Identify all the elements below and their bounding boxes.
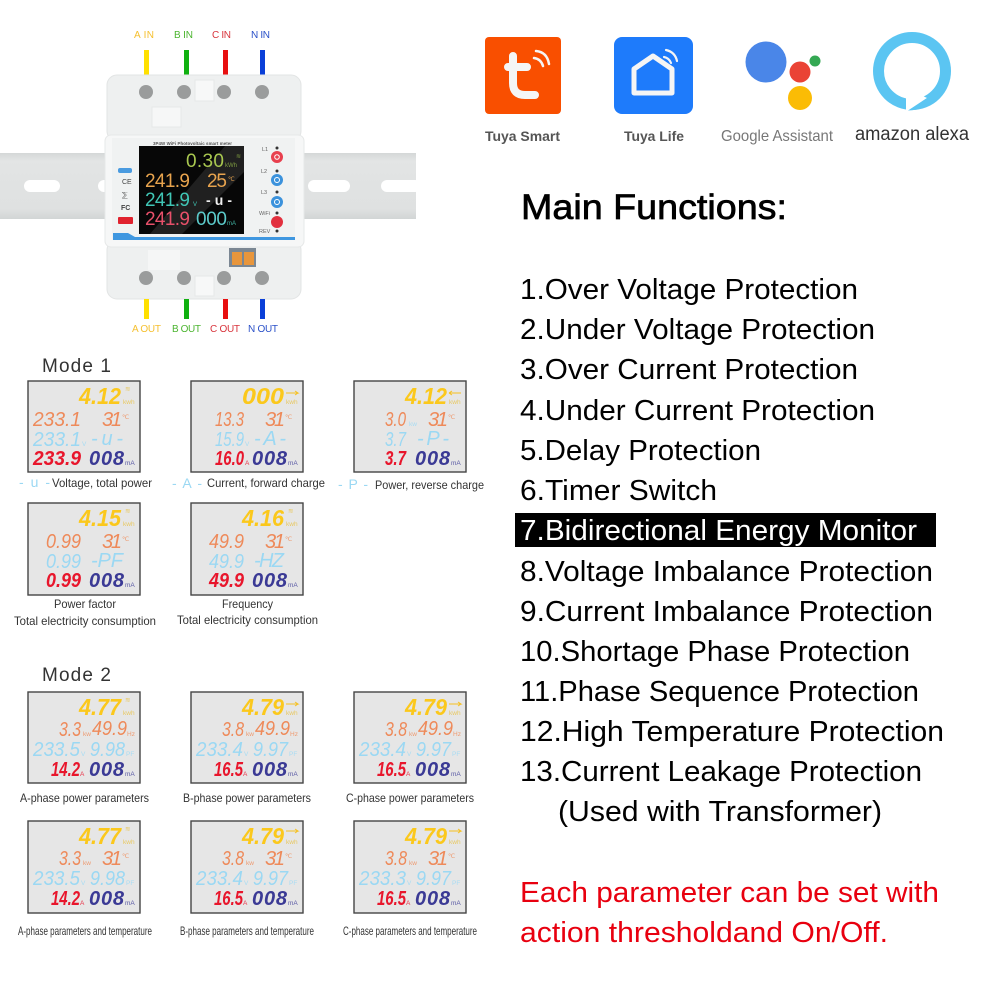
device: din rail smart meter <box>0 30 421 335</box>
note: red parameter text: action thresholdand On/Off. <box>520 917 888 949</box>
lcd: power factor: 0.99 <box>46 570 82 592</box>
lcd: a-phase power: ≋ <box>125 697 131 704</box>
lcd: voltage, total power: 233.9 <box>32 448 82 470</box>
lcd: c-phase temperature: 16.5 <box>377 888 407 910</box>
label: tuya smart: Tuya Smart <box>485 128 560 144</box>
label: google assistant: Google Assistant <box>721 128 834 145</box>
lcd: voltage, total power: -u- <box>91 428 123 450</box>
lcd: a-phase power: 49.9 <box>92 718 127 740</box>
lcd: c-phase power: 4.79 <box>404 694 447 720</box>
lcd: c-phase power: V <box>407 751 412 758</box>
lcd: b-phase temperature: 008 <box>252 888 288 910</box>
input labels: B IN <box>174 30 193 41</box>
lcd: b-phase temperature: A <box>243 900 248 907</box>
lcd: b-phase temperature: mA <box>288 900 298 907</box>
lcd: a-phase temperature <box>28 821 140 913</box>
lcd: a-phase temperature: PF <box>126 880 134 887</box>
lcd: b-phase temperature: 3.8 <box>222 848 244 870</box>
meter display: 241.9 <box>145 190 190 211</box>
caption: b-phase power: B-phase power parameters <box>183 791 311 805</box>
caption: a-phase temperature: A-phase parameters and temperature <box>18 924 152 938</box>
lcd: b-phase power: kwh <box>286 710 298 717</box>
lcd: power, reverse charge: 008 <box>415 448 451 470</box>
output labels <box>132 324 278 335</box>
lcd: c-phase temperature: kw <box>409 860 417 867</box>
lcd: c-phase power: kw <box>409 731 417 738</box>
lcd: power factor: 008 <box>89 570 125 592</box>
lcd: current, forward charge: 13.3 <box>215 409 244 431</box>
meter display: V <box>193 202 197 208</box>
heading: mode 1: Mode 1 <box>42 356 111 377</box>
lcd: power, reverse charge: 3.7 <box>385 448 407 470</box>
icon: amazon alexa <box>878 38 946 111</box>
meter display: 000 <box>196 209 227 230</box>
lcd: frequency <box>191 503 303 595</box>
lcd: current, forward charge: A <box>245 460 250 467</box>
lcd: b-phase power: 16.5 <box>214 759 244 781</box>
lcd: a-phase power: 008 <box>89 759 125 781</box>
lcd: c-phase power: 49.9 <box>418 718 453 740</box>
caption: frequency: Frequency <box>222 597 273 611</box>
lcd: c-phase power: A <box>406 771 411 778</box>
lcd: a-phase temperature: 31 <box>102 848 122 870</box>
lcd: frequency: 49.9 <box>209 531 244 553</box>
note: red parameter text <box>520 877 939 949</box>
lcd: voltage, total power: 008 <box>89 448 125 470</box>
lcd: c-phase power: 3.8 <box>385 719 407 741</box>
meter display: ≋ <box>236 154 241 160</box>
lcd: frequency: mA <box>288 582 298 589</box>
lcd: frequency: -HZ <box>254 550 285 572</box>
lcd: voltage, total power: ≋ <box>125 386 131 393</box>
caption: power factor: Power factor <box>54 597 116 611</box>
label: amazon alexa: amazon alexa <box>855 124 969 145</box>
list: main functions: 1.Over Voltage Protection <box>520 274 858 306</box>
lcd: current, forward charge: 008 <box>252 448 288 470</box>
lcd: a-phase power <box>28 692 140 783</box>
note: red parameter text: Each parameter can be set with <box>520 877 939 909</box>
lcd: voltage, total power: ℃ <box>122 414 130 421</box>
lcd: power factor: 0.99 <box>46 531 81 553</box>
list: main functions: 5.Delay Protection <box>520 435 761 467</box>
caption: c-phase power: C-phase power parameters <box>346 791 474 805</box>
lcd: a-phase power: 9.98 <box>90 739 125 761</box>
output wires <box>144 299 265 319</box>
lcd: a-phase power: 233.5 <box>32 739 81 761</box>
front plate <box>105 135 304 247</box>
lcd: c-phase temperature: ℃ <box>448 853 456 860</box>
caption: frequency: Total electricity consumption <box>177 613 318 627</box>
lcd: b-phase power: 3.8 <box>222 719 244 741</box>
lcd: power factor: mA <box>125 582 135 589</box>
lcd: voltage, total power: 4.12 <box>78 383 121 409</box>
lcd: power, reverse charge: 3.7 <box>385 429 407 451</box>
lcd: b-phase power: PF <box>289 751 297 758</box>
caption: b-phase temperature: B-phase parameters and temperature <box>180 924 314 938</box>
lcd: a-phase temperature: V <box>81 880 86 887</box>
lcd: c-phase power: 9.97 <box>416 739 452 761</box>
title: main functions: Main Functions: <box>521 188 787 227</box>
input labels: C IN <box>212 30 231 41</box>
caption: power legend: - P - <box>338 476 368 492</box>
icon: tuya life <box>614 37 693 114</box>
list: main functions: 4.Under Current Protection <box>520 395 875 427</box>
lcd: current, forward charge: -A- <box>254 428 286 450</box>
lcd: b-phase power: Hz <box>290 731 298 738</box>
lcd: a-phase temperature: 3.3 <box>59 848 81 870</box>
lcd: voltage, total power: mA <box>125 460 135 467</box>
right indicators and buttons: L2 <box>261 169 267 175</box>
meter display: mA <box>227 221 236 227</box>
lcd: b-phase power <box>191 692 303 783</box>
right indicators and buttons: REV <box>259 229 271 235</box>
icon: google assistant <box>746 42 820 110</box>
lcd: power, reverse charge: kw <box>409 421 417 428</box>
input wires <box>144 50 265 75</box>
lcd: voltage, total power: 233.1 <box>32 409 81 431</box>
meter display: -u- <box>206 192 232 208</box>
caption: power legend: Power, reverse charge <box>375 478 484 492</box>
right indicators and buttons: L1 <box>262 147 268 153</box>
lcd: voltage, total power <box>28 381 140 472</box>
lcd: c-phase power: PF <box>452 751 460 758</box>
lcd: c-phase temperature: V <box>407 880 412 887</box>
lcd: b-phase temperature: 31 <box>265 848 285 870</box>
lcd: a-phase temperature: 9.98 <box>90 868 125 890</box>
lcd: current, forward charge: 15.9 <box>215 429 244 451</box>
din rail <box>0 150 421 222</box>
lcd: c-phase power: 233.4 <box>358 739 406 761</box>
left certification badges: ⅀ <box>122 191 128 199</box>
lcd: b-phase power: 4.79 <box>241 694 284 720</box>
lcd: b-phase power: V <box>244 751 249 758</box>
caption: frequency <box>177 597 318 627</box>
lcd: voltage, total power: kwh <box>123 399 135 406</box>
lcd: power, reverse charge: 4.12 <box>404 383 447 409</box>
label: tuya life: Tuya Life <box>624 128 684 144</box>
lcd: b-phase temperature: 16.5 <box>214 888 244 910</box>
lcd: a-phase temperature: kw <box>83 860 91 867</box>
lower terminal housing <box>107 240 301 299</box>
lcd: c-phase temperature: 4.79 <box>404 823 447 849</box>
lcd: a-phase temperature: ≋ <box>125 826 131 833</box>
lcd: c-phase power: Hz <box>453 731 461 738</box>
meter display <box>139 146 244 234</box>
lcd: frequency: 008 <box>252 570 288 592</box>
caption: current legend: Current, forward charge <box>207 476 325 490</box>
list: main functions: 3.Over Current Protection <box>520 354 858 386</box>
lcd: b-phase power: kw <box>246 731 254 738</box>
lcd: a-phase temperature: 233.5 <box>32 868 81 890</box>
lcd: current, forward charge: ℃ <box>285 414 293 421</box>
lcd: a-phase temperature: 008 <box>89 888 125 910</box>
lcd: c-phase temperature: 233.3 <box>358 868 406 890</box>
lcd: a-phase temperature: mA <box>125 900 135 907</box>
meter display: 241.9 <box>145 171 190 192</box>
lcd: frequency: 31 <box>265 531 285 553</box>
list: main functions: 8.Voltage Imbalance Protection <box>520 556 933 588</box>
lcd: current, forward charge: 31 <box>265 409 285 431</box>
caption: current legend: - A - <box>172 475 202 491</box>
input labels: N IN <box>251 30 270 41</box>
lcd: b-phase temperature: kw <box>246 860 254 867</box>
lcd: c-phase temperature: PF <box>452 880 460 887</box>
lcd: a-phase power: PF <box>126 751 134 758</box>
right indicators and buttons: WiFi <box>259 211 270 217</box>
lcd: a-phase temperature: kwh <box>123 839 135 846</box>
lcd: power factor: 4.15 <box>78 505 122 531</box>
lcd: power, reverse charge: mA <box>451 460 461 467</box>
input labels <box>134 30 270 41</box>
list: main functions: (Used with Transformer) <box>558 796 882 828</box>
lcd: b-phase power: 49.9 <box>255 718 290 740</box>
lcd: c-phase power: mA <box>451 771 461 778</box>
list: main functions: 9.Current Imbalance Protection <box>520 596 933 628</box>
list: main functions: 6.Timer Switch <box>520 475 717 507</box>
meter display: kWh <box>225 163 237 169</box>
lcd: a-phase power: mA <box>125 771 135 778</box>
meter display: 0.30 <box>186 151 224 172</box>
lcd: a-phase power: kwh <box>123 710 135 717</box>
lcd: power, reverse charge <box>354 381 466 472</box>
lcd: b-phase power: A <box>243 771 248 778</box>
heading: mode 2: Mode 2 <box>42 665 111 686</box>
lcd: power factor: -PF <box>91 550 125 572</box>
lcd: voltage, total power: V <box>82 441 87 448</box>
lcd: a-phase power: kw <box>83 731 91 738</box>
lcd: frequency: 49.9 <box>208 570 245 592</box>
lcd: a-phase power: Hz <box>127 731 135 738</box>
lcd: power factor: ℃ <box>122 536 130 543</box>
lcd: current, forward charge: kwh <box>286 399 298 406</box>
lcd: power factor: 0.99 <box>46 551 81 573</box>
orange connector <box>229 248 256 267</box>
lcd: a-phase power: V <box>81 751 86 758</box>
lcd: c-phase temperature: mA <box>451 900 461 907</box>
output labels: N OUT <box>248 324 278 335</box>
lcd: power, reverse charge: -P- <box>417 428 449 450</box>
meter display: 25 <box>207 171 227 192</box>
caption: c-phase temperature: C-phase parameters and temperature <box>343 924 477 938</box>
lcd: b-phase temperature: V <box>244 880 249 887</box>
lcd: power, reverse charge: 3.0 <box>385 409 406 431</box>
icon: tuya smart <box>485 37 561 114</box>
lcd: c-phase power: kwh <box>449 710 461 717</box>
lcd: a-phase power: 14.2 <box>51 759 80 781</box>
front plate: 3P4W WiFi Photovoltaic smart meter <box>153 141 232 146</box>
lcd: a-phase temperature: A <box>80 900 85 907</box>
lcd: a-phase power: 4.77 <box>78 694 122 720</box>
lcd: c-phase temperature: 9.97 <box>416 868 452 890</box>
lcd: c-phase temperature: A <box>406 900 411 907</box>
lcd: b-phase temperature: 9.97 <box>253 868 289 890</box>
list: main functions: 2.Under Voltage Protection <box>520 314 875 346</box>
lcd: c-phase temperature: 3.8 <box>385 848 407 870</box>
lcd: frequency: kwh <box>286 521 298 528</box>
lcd: voltage, total power: 233.1 <box>32 429 81 451</box>
list: main functions: 13.Current Leakage Protection <box>520 756 922 788</box>
caption: power factor <box>14 597 156 628</box>
right indicators and buttons: L3 <box>261 190 267 196</box>
lcd: b-phase power: 008 <box>252 759 288 781</box>
lcd: a-phase temperature: 4.77 <box>78 823 122 849</box>
left certification badges: FC <box>121 205 130 212</box>
upper terminal housing <box>107 75 301 141</box>
lcd: voltage, total power: 31 <box>102 409 122 431</box>
lcd: power factor: kwh <box>123 521 135 528</box>
lcd: frequency: ≋ <box>288 508 294 515</box>
lcd: c-phase temperature: 008 <box>415 888 451 910</box>
caption: current legend <box>172 475 325 491</box>
lcd: power, reverse charge: 31 <box>428 409 448 431</box>
caption: voltage legend: - u - <box>19 474 50 490</box>
lcd: c-phase temperature <box>354 821 466 913</box>
lcd: power factor: ≋ <box>125 508 131 515</box>
meter display: 241.9 <box>145 209 190 230</box>
caption: voltage legend: Voltage, total power <box>52 476 152 490</box>
lcd: a-phase temperature: 14.2 <box>51 888 80 910</box>
lcd: frequency: ℃ <box>285 536 293 543</box>
list: main functions <box>515 274 944 828</box>
lcd: b-phase power: 9.97 <box>253 739 289 761</box>
lcd: current, forward charge: V <box>245 441 250 448</box>
lcd: b-phase temperature <box>191 821 303 913</box>
list: main functions: 10.Shortage Phase Protection <box>520 636 910 668</box>
caption: voltage legend <box>19 474 152 490</box>
lcd: power, reverse charge: ℃ <box>448 414 456 421</box>
list: main functions: 11.Phase Sequence Protection <box>520 676 919 708</box>
lcd: current, forward charge: 16.0 <box>215 448 244 470</box>
lcd: c-phase power: 16.5 <box>377 759 407 781</box>
lcd: b-phase temperature: 4.79 <box>241 823 284 849</box>
lcd: current, forward charge <box>191 381 303 472</box>
input labels: A IN <box>134 30 154 41</box>
caption: a-phase power: A-phase power parameters <box>20 791 149 805</box>
lcd: c-phase power <box>354 692 466 783</box>
lcd: c-phase temperature: 31 <box>428 848 448 870</box>
lcd: b-phase temperature: PF <box>289 880 297 887</box>
left certification badges <box>118 168 133 224</box>
lcd: current, forward charge: 000 <box>242 383 284 409</box>
list: main functions: 12.High Temperature Protection <box>520 716 944 748</box>
lcd: frequency: 49.9 <box>209 551 244 573</box>
left certification badges: CE <box>122 179 132 186</box>
output labels: B OUT <box>172 324 201 335</box>
lcd: a-phase temperature: ℃ <box>122 853 130 860</box>
caption: power legend <box>338 476 484 492</box>
lcd: c-phase power: 008 <box>415 759 451 781</box>
output labels: A OUT <box>132 324 161 335</box>
lcd: current, forward charge: mA <box>288 460 298 467</box>
output labels: C OUT <box>210 324 240 335</box>
lcd: a-phase power: 3.3 <box>59 719 81 741</box>
lcd: b-phase temperature: 233.4 <box>195 868 243 890</box>
lcd: a-phase power: A <box>80 771 85 778</box>
right indicators and buttons <box>259 146 283 235</box>
caption: power factor: Total electricity consumption <box>14 614 156 628</box>
lcd: frequency: 4.16 <box>241 505 284 531</box>
highlighted item 7: 7.Bidirectional Energy Monitor <box>520 515 917 547</box>
lcd: b-phase temperature: kwh <box>286 839 298 846</box>
lcd: power, reverse charge: kwh <box>449 399 461 406</box>
lcd: b-phase power: 233.4 <box>195 739 243 761</box>
lcd: power factor <box>28 503 140 595</box>
meter display: ℃ <box>228 177 235 183</box>
lcd: b-phase power: mA <box>288 771 298 778</box>
lcd: b-phase temperature: ℃ <box>285 853 293 860</box>
lcd: c-phase temperature: kwh <box>449 839 461 846</box>
lcd: power factor: 31 <box>102 531 122 553</box>
